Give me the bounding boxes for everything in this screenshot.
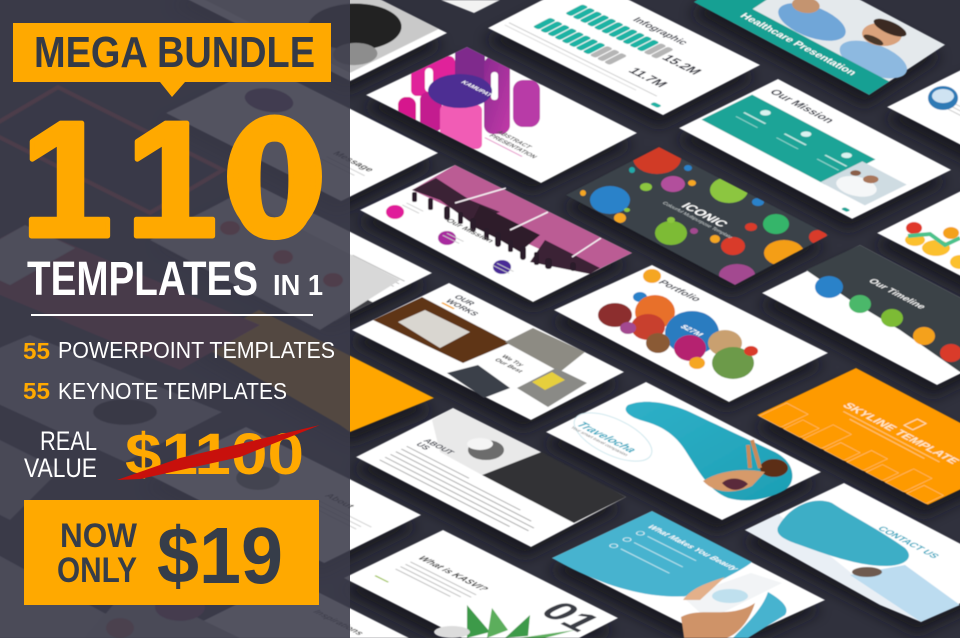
iconic title: Colourful Multipurpose Template [660, 201, 734, 239]
templates in 1 heading: TEMPLATES [27, 253, 258, 306]
slide: about left: About [322, 492, 357, 510]
message slide lower left [0, 545, 150, 638]
about us text [379, 438, 534, 532]
slide: our timeline [762, 245, 960, 385]
works text: WORKS [443, 298, 482, 317]
crimson slide [0, 225, 260, 370]
slide: travelocha [546, 382, 821, 520]
mission icon circles [386, 205, 404, 219]
slide: skyline template [757, 368, 960, 505]
timeline title: Our Timeline [865, 278, 929, 311]
slide shadows [350, 4, 960, 638]
slide: infographic people [488, 0, 760, 115]
real value label: VALUE [24, 453, 97, 483]
mission text: Our Mission [443, 217, 497, 244]
dark slide with red frame [0, 87, 223, 213]
iconic title: ICONIC [678, 201, 732, 229]
portfolio text: Portfolio [655, 279, 703, 303]
beauty text [608, 524, 742, 590]
drips [412, 192, 576, 271]
portfolio circles [643, 269, 661, 283]
number 110: 110 [21, 88, 320, 271]
red strike [117, 425, 320, 480]
portfolio text [658, 279, 704, 337]
keynote line: 55 [23, 378, 50, 404]
slide: our mission pink [360, 165, 632, 302]
slide: black and white photo top left [175, 0, 447, 81]
works photos [373, 297, 510, 363]
abstract colour bars [398, 42, 540, 149]
price: $19 [157, 511, 283, 600]
now only text: NOW [60, 517, 138, 555]
travelocha title: Travelocha [573, 420, 640, 454]
slide: small top sliver [441, 0, 500, 13]
slide: cloud stat [886, 70, 960, 146]
slide: portfolio [554, 265, 828, 402]
divider line [31, 314, 313, 316]
summary slide [0, 335, 222, 462]
travelocha title: Your smart travel companion [568, 426, 630, 457]
slide: our works [352, 283, 624, 420]
abstract text: KAMUPAT [459, 80, 494, 98]
contact title: CONTACT US [874, 525, 942, 560]
slide: message partly under panel [166, 82, 438, 201]
templates in 1 heading: IN 1 [273, 270, 323, 302]
about us text: US [414, 441, 433, 451]
abstract text: PRESENTATION [487, 134, 538, 159]
oval outline [567, 403, 659, 471]
beauty text: What Makes You Beauty [645, 524, 742, 572]
contact blob [777, 501, 909, 566]
travel blob [626, 402, 792, 500]
plant [467, 605, 575, 638]
slide: message partly under panel: Message [330, 150, 377, 174]
slide: iconic [566, 142, 829, 286]
abstract text [460, 80, 538, 159]
slide: infographic people: 11.7M [625, 66, 671, 89]
works text [440, 294, 524, 374]
people row two [532, 18, 627, 65]
mission text [402, 202, 514, 274]
phone in hand [683, 573, 782, 620]
skyline buildings [759, 402, 956, 504]
slide: left small [260, 186, 432, 314]
brown-orange slide [197, 310, 434, 432]
slide: our mission teal: Our Mission [766, 88, 837, 125]
kasvi text [374, 538, 612, 638]
iconic circles [580, 142, 827, 286]
now only text: ONLY [57, 551, 137, 590]
left panel overlay [0, 0, 350, 638]
old price crossed out: $1100 [125, 422, 304, 487]
slide: our mission teal [679, 79, 951, 219]
slide: infographic people: 15.2M [658, 53, 705, 76]
slide: what makes you beauty [552, 511, 825, 638]
inspirations title: Inspirations [311, 609, 366, 636]
slide: chart right edge [876, 190, 960, 276]
slide: healthcare presentation: Healthcare Presentation [737, 12, 859, 77]
banner text: MEGA BUNDLE [34, 28, 315, 77]
slide: abstract presentation [366, 42, 637, 183]
slide: contact us [745, 483, 960, 622]
white diagonal lines [455, 188, 601, 257]
works text: Our Best [492, 358, 525, 374]
real value label: REAL [40, 426, 97, 456]
abstract title ellipse [428, 74, 492, 108]
grey slide with red icons [150, 195, 400, 330]
swimmer figure [760, 459, 788, 477]
works text: We Try [499, 354, 525, 368]
about us text: ABOUT [421, 437, 458, 456]
underlay slides hidden by panel [0, 87, 400, 638]
powerpoint line: POWERPOINT TEMPLATES [58, 337, 335, 363]
powerpoint line: 55 [23, 338, 50, 364]
slide: what is kasvi [344, 530, 618, 638]
slide: inspirations bottom left [193, 578, 409, 638]
kasvi text: 01 [530, 596, 612, 637]
slide: about us [356, 408, 626, 547]
slide: infographic people: Infographic [630, 16, 690, 47]
pink city photo [412, 165, 632, 273]
kasvi text: What is KASVI? [415, 555, 490, 593]
value slide [236, 466, 280, 490]
orange mega bundle banner [13, 23, 331, 97]
keynote line: KEYNOTE TEMPLATES [58, 378, 287, 404]
works text: OUR [452, 294, 478, 307]
slide: skyline template: SKYLINE TEMPLATE [839, 401, 960, 465]
now only price box [24, 500, 319, 605]
real value label [24, 426, 97, 483]
portfolio text: $27M [678, 324, 706, 337]
slide: about left [149, 427, 421, 563]
now only text [57, 517, 138, 590]
people row one [565, 4, 674, 59]
slide: healthcare presentation [694, 0, 948, 96]
abstract text: ABSTRACT [494, 130, 534, 150]
